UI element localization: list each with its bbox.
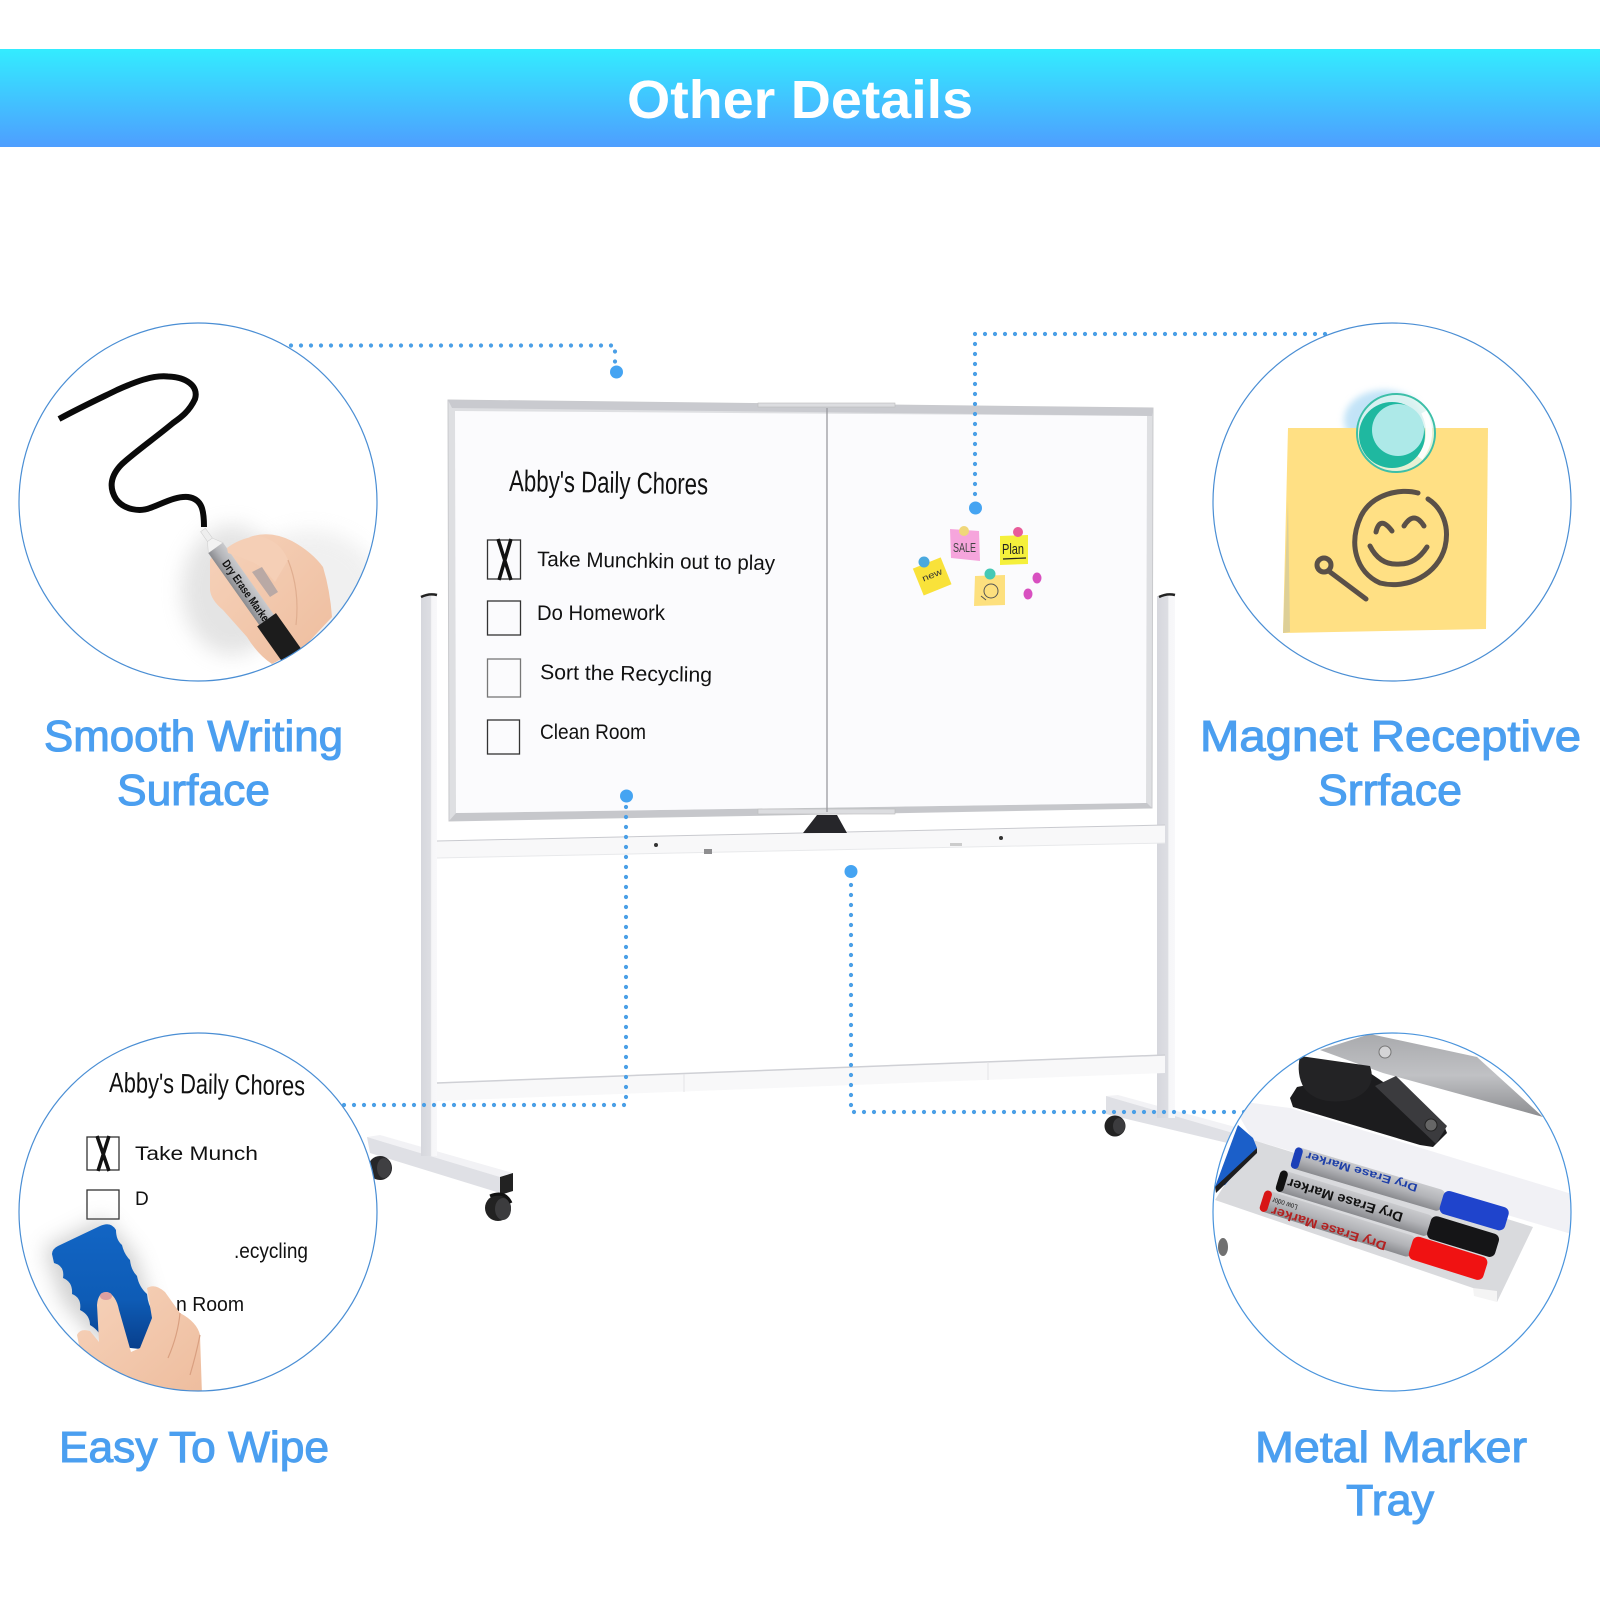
zoomed heading: Abby's Daily Chores <box>109 1067 305 1101</box>
left post <box>421 596 437 1156</box>
item four: Clean Room <box>540 721 646 744</box>
thumb nail <box>100 1292 112 1300</box>
circle outline <box>1213 323 1571 681</box>
right post <box>1157 596 1175 1118</box>
bracket arm <box>1375 1076 1447 1144</box>
top and bottom hinges <box>758 403 895 814</box>
circle outline <box>19 323 377 681</box>
eraser <box>52 1224 154 1349</box>
title: Other Details <box>627 70 973 130</box>
left foot <box>367 1135 513 1195</box>
smiley drawing <box>1355 491 1446 585</box>
pen stroke <box>59 376 204 527</box>
magnet on new note <box>918 556 930 568</box>
tray end cap <box>1473 1288 1497 1302</box>
label: magnet receptive srrface: Magnet Receptive <box>1200 712 1581 761</box>
lower crossbar <box>437 1055 1165 1101</box>
zoomed checked box <box>87 1136 119 1171</box>
marker reflection <box>252 567 278 597</box>
upper crossbar <box>437 825 1165 858</box>
black marker <box>1274 1169 1501 1258</box>
panel: smooth writing circle <box>19 323 380 681</box>
item one: Take Munchkin out to play <box>537 548 776 575</box>
zoomed box two <box>87 1190 119 1219</box>
label: easy to wipe: Easy To Wipe <box>59 1423 329 1472</box>
panel: easy to wipe circle <box>19 1033 377 1395</box>
zoomed item three: .ecycling <box>234 1240 308 1263</box>
pivot bracket <box>803 815 847 833</box>
black knob <box>1298 1056 1372 1086</box>
zoomed item two: D <box>135 1189 149 1210</box>
whiteboard <box>448 400 1153 833</box>
pin doodle <box>1317 558 1366 599</box>
red low odor note: Low odor <box>1271 1195 1299 1212</box>
checked box <box>488 539 520 580</box>
red marker label: Dry Erase Marker <box>1269 1204 1388 1253</box>
chores list <box>488 465 776 754</box>
black marker label: Dry Erase Marker <box>1285 1175 1405 1225</box>
finger crease <box>288 560 297 625</box>
item two: Do Homework <box>537 602 665 625</box>
left band shading <box>1230 1100 1575 1235</box>
black bracket <box>1290 1073 1447 1147</box>
connector: smooth writing <box>291 346 623 378</box>
rail screw <box>1379 1046 1391 1058</box>
hand <box>77 1286 202 1395</box>
tray eraser <box>1215 1125 1257 1193</box>
header banner <box>0 49 1600 147</box>
box three <box>488 659 520 697</box>
magnet <box>1357 394 1435 472</box>
note: plan: Plan <box>1002 541 1024 558</box>
hand <box>210 534 332 664</box>
centre divider <box>826 408 828 812</box>
caster: rear left <box>368 1156 392 1180</box>
writing surface <box>455 411 1147 813</box>
marker <box>200 528 300 660</box>
sticky note <box>1283 428 1488 633</box>
blue marker <box>1290 1145 1510 1232</box>
label: metal marker tray: Metal Marker <box>1255 1423 1527 1472</box>
blue marker label: Dry Erase Marker <box>1304 1149 1419 1193</box>
panel: magnet receptive circle <box>1213 323 1571 681</box>
label: smooth writing surface: Surface <box>117 766 270 815</box>
sticky notes on board <box>913 526 1042 606</box>
eraser shadow <box>44 1218 155 1345</box>
box two <box>488 601 520 635</box>
label: smooth writing surface: Smooth Writing <box>44 712 343 761</box>
frame <box>448 400 1153 821</box>
caster: front left <box>485 1194 511 1221</box>
red marker <box>1258 1189 1489 1283</box>
label: magnet receptive srrface: Srrface <box>1318 766 1462 815</box>
circle outline <box>1213 1033 1571 1391</box>
connector: magnet receptive <box>969 334 1325 514</box>
marker label: Dry Erase Marker <box>219 558 273 627</box>
zoomed item one: Take Munch <box>135 1144 258 1165</box>
index finger <box>227 538 280 581</box>
label: magnet receptive srrface <box>1200 712 1581 815</box>
caster: rear right <box>1104 1116 1126 1136</box>
chores heading: Abby's Daily Chores <box>509 465 708 501</box>
steel rail <box>1320 1034 1543 1117</box>
label: smooth writing surface <box>44 712 343 815</box>
lower right shade <box>284 532 367 640</box>
label: metal marker tray <box>1255 1423 1527 1525</box>
hand shadow <box>182 525 282 655</box>
bracket bolt <box>1425 1119 1437 1131</box>
panel: metal marker tray circle <box>1213 1033 1575 1391</box>
circle outline <box>19 1033 377 1391</box>
tray <box>1215 1140 1533 1302</box>
note: sale: SALE <box>953 540 976 555</box>
magnet glow <box>1344 390 1424 450</box>
note: smiley <box>974 568 1005 606</box>
zoomed item four: n Room <box>176 1294 244 1316</box>
whiteboard stand <box>367 594 1250 1221</box>
note fold shadow <box>1283 500 1290 633</box>
box four <box>488 720 520 754</box>
label: metal marker tray: Tray <box>1346 1476 1434 1525</box>
connector: easy to wipe <box>344 790 633 1105</box>
blurred caster <box>1218 1238 1228 1256</box>
note: new: new <box>920 566 944 583</box>
finger crease <box>168 1313 200 1375</box>
right foot <box>1106 1095 1250 1146</box>
connector: marker tray <box>844 865 1244 1112</box>
item three: Sort the Recycling <box>540 661 712 687</box>
loose magnets <box>1024 572 1042 600</box>
